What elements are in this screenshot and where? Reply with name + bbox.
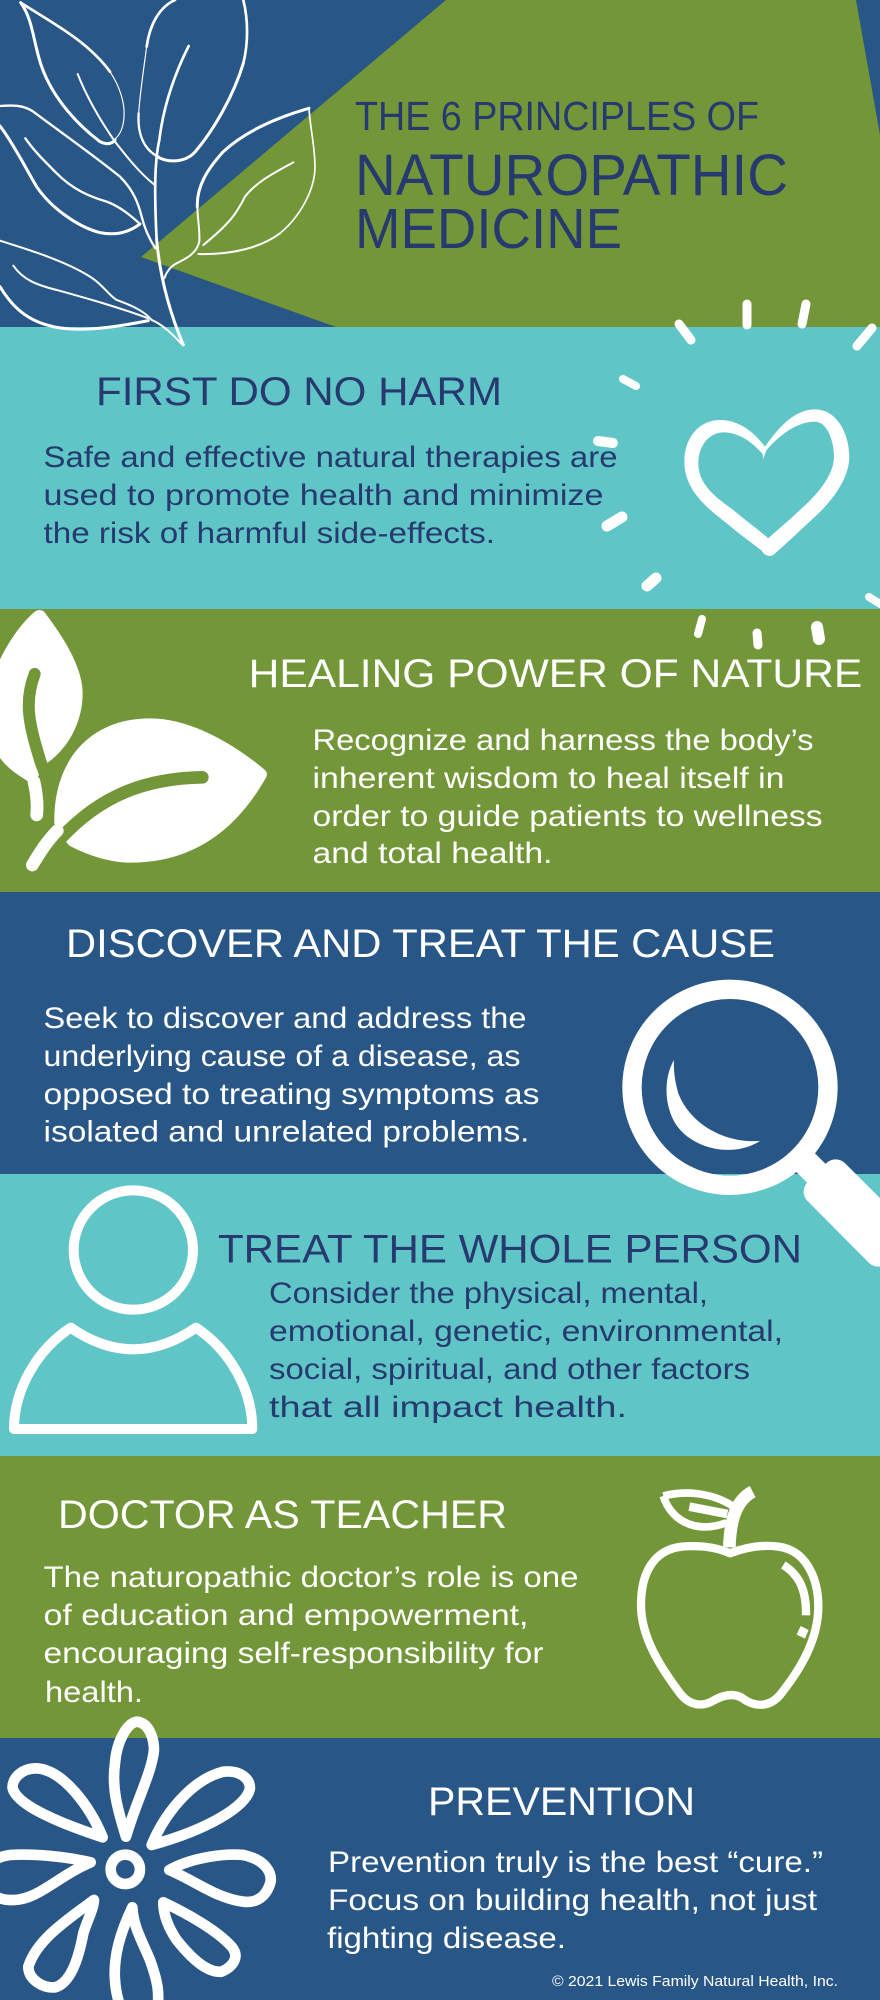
panel: discover and treat the cause	[44, 922, 880, 1253]
text block: Recognize and harness the body’s	[312, 724, 814, 757]
text block	[44, 1002, 540, 1148]
text block	[44, 441, 618, 550]
heading: DOCTOR AS TEACHER	[58, 1493, 507, 1537]
icon: line-art leaves	[0, 0, 315, 345]
text block: Consider the physical, mental,	[269, 1277, 708, 1310]
text block: that all impact health.	[269, 1391, 627, 1424]
band: doctor as teacher background	[0, 1456, 880, 1738]
footer credit: © 2021 Lewis Family Natural Health, Inc.	[552, 1974, 838, 1990]
text block: isolated and unrelated problems.	[44, 1116, 530, 1148]
text block: and total health.	[312, 837, 552, 870]
text block: emotional, genetic, environmental,	[269, 1315, 783, 1348]
band: discover and treat background	[0, 892, 880, 1174]
text block: opposed to treating symptoms as	[44, 1078, 540, 1111]
panel: healing power of nature	[0, 610, 862, 870]
text block: Seek to discover and address the	[44, 1002, 526, 1035]
heading: HEALING POWER OF NATURE	[249, 652, 862, 696]
icon: apple	[641, 1492, 818, 1705]
text block: underlying cause of a disease, as	[44, 1040, 520, 1073]
text block: encouraging self-responsibility for	[44, 1637, 544, 1670]
text block	[44, 1561, 578, 1709]
icon: flower	[0, 1722, 271, 2000]
panel: first do no harm	[44, 304, 880, 645]
text block: social, spiritual, and other factors	[269, 1353, 750, 1386]
band: prevention background	[0, 1738, 880, 2000]
text block: inherent wisdom to heal itself in	[312, 762, 784, 795]
text block: Prevention truly is the best “cure.”	[328, 1846, 823, 1879]
text block: used to promote health and minimize	[44, 479, 604, 512]
panel: prevention	[0, 1722, 838, 2000]
text block	[327, 1846, 823, 1955]
icon: person	[14, 1190, 252, 1429]
title line 2: NATUROPATHIC	[355, 143, 788, 208]
text block: order to guide patients to wellness	[312, 800, 822, 833]
icon: magnifying glass	[632, 989, 880, 1253]
title line 3: MEDICINE	[355, 197, 622, 261]
band: whole person background	[0, 1174, 880, 1456]
heading: TREAT THE WHOLE PERSON	[218, 1228, 802, 1272]
header panel	[0, 0, 788, 345]
heading: FIRST DO NO HARM	[96, 370, 502, 414]
band: healing power background	[0, 609, 880, 892]
text block: Safe and effective natural therapies are	[44, 441, 618, 474]
heading: DISCOVER AND TREAT THE CAUSE	[66, 922, 775, 966]
panel: doctor as teacher	[44, 1492, 818, 1709]
heading: PREVENTION	[428, 1780, 695, 1824]
title line 1: THE 6 PRINCIPLES OF	[355, 93, 759, 139]
icon: two leaves	[0, 610, 267, 865]
text block: the risk of harmful side-effects.	[44, 517, 495, 550]
title	[355, 93, 788, 261]
text block: fighting disease.	[327, 1922, 566, 1955]
text block	[269, 1277, 783, 1424]
band: first do no harm background	[0, 327, 880, 609]
text block	[312, 724, 822, 870]
header background	[0, 0, 880, 327]
text block: of education and empowerment,	[44, 1599, 528, 1632]
text block: health.	[45, 1676, 143, 1709]
icon: heart with rays	[598, 304, 880, 645]
text block: Focus on building health, not just	[328, 1884, 817, 1917]
panel: treat the whole person	[14, 1190, 802, 1429]
text block: The naturopathic doctor’s role is one	[44, 1561, 578, 1594]
